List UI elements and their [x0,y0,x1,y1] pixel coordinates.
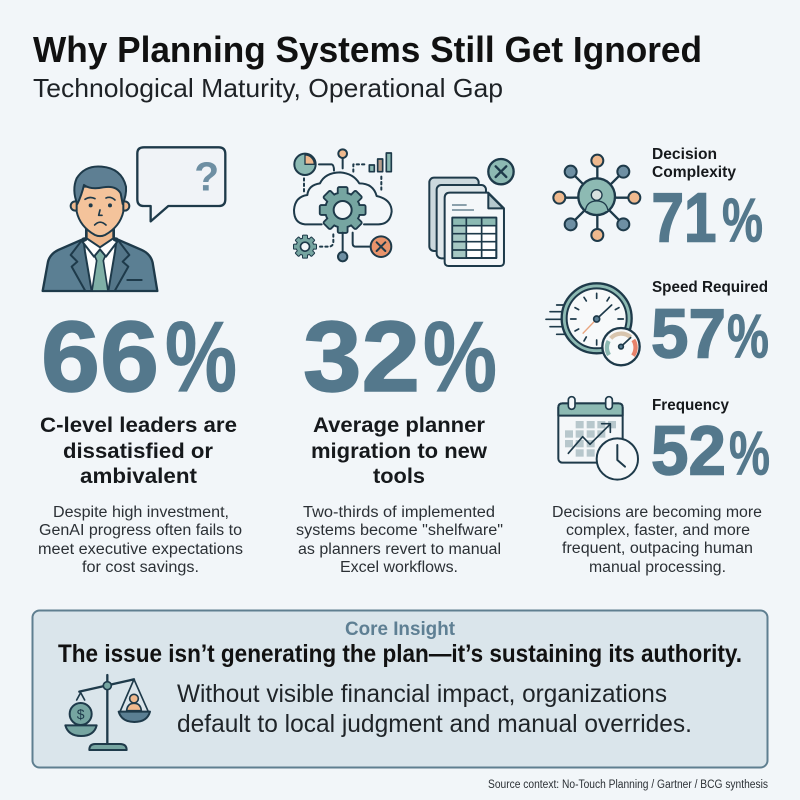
label: speed required: Speed Required [652,279,768,296]
stat: 57%: 57 [651,294,726,372]
stat: 66%: 66 [41,301,159,413]
stat: 71%: 71 [652,178,716,256]
stat: 71% [652,178,763,256]
text: leaders description: Despite high investment, [53,504,229,521]
icon: cloud with gears and data [294,149,514,266]
heading: leaders [40,414,237,488]
label: decision complexity: Decision [652,146,717,163]
stat: 32%: % [423,301,497,413]
text: planner description: Excel workflows. [340,559,458,576]
panel: planner migration column [294,149,514,576]
label: decision complexity: Complexity [652,164,736,181]
text: decision pressure description: frequent, outpacing human [562,540,753,557]
text: decision pressure description: manual processing. [589,559,726,576]
label: decision complexity [652,146,736,181]
icon: dissatisfied executive with question bubble: ? [194,154,219,200]
heading: leaders: ambivalent [80,465,197,488]
stat: 32%: 32 [303,301,420,413]
text: decision pressure description: complex, faster, and more [566,522,750,539]
heading: leaders: dissatisfied or [63,440,213,463]
stat: 52%: % [729,420,770,488]
stat: 52% [651,412,770,490]
stat: 66% [41,301,237,413]
text: planner description: as planners revert to manual [298,541,501,558]
text: leaders description: meet executive expectations [38,541,243,558]
heading: planner migration: migration to new [311,440,488,463]
icon: balance scale [65,675,150,750]
heading: planner migration: tools [373,465,425,488]
stat: 57% [651,294,769,372]
source note: Source context: No-Touch Planning / Gartner / BCG synthesis [488,779,768,791]
stat: 66%: % [165,301,237,413]
stat: 52%: 52 [651,412,726,490]
subtitle: Technological Maturity, Operational Gap [33,73,503,103]
stat: 32% [303,301,497,413]
panel: core insight [32,610,768,768]
panel: decision pressure column [546,146,770,576]
title: Why Planning Systems Still Get Ignored [33,29,702,70]
heading: planner migration [311,414,488,488]
heading: core insight: Core Insight [345,619,456,640]
icon: calendar with clock [558,397,638,480]
stat: 71%: % [722,186,763,256]
text: leaders description: for cost savings. [82,559,199,576]
icon: balance scale: $ [77,706,85,722]
text: insight explanation: default to local judgment and manual overrides. [177,710,692,738]
text: planner description [296,504,503,576]
heading: planner migration: Average planner [313,414,485,437]
heading: leaders: C-level leaders are [40,414,237,437]
text: leaders description: GenAI progress often fails to [39,522,242,539]
text: planner description: systems become "shelfware" [296,522,503,539]
text: insight explanation: Without visible financial impact, organizations [177,680,667,708]
panel: leaders column [38,147,243,576]
icon: speedometer [546,283,640,365]
icon: dissatisfied executive with question bubble [43,147,225,291]
text: decision pressure description: Decisions are becoming more [552,504,762,521]
stat: 57%: % [727,302,769,372]
statement: The issue isn’t generating the plan—it’s sustaining its authority. [58,640,742,668]
text: leaders description [38,504,243,576]
text: decision pressure description [552,504,762,576]
text: insight explanation [177,680,692,738]
label: frequency: Frequency [652,397,729,414]
icon: decision network [553,155,640,241]
text: planner description: Two-thirds of implemented [303,504,495,521]
